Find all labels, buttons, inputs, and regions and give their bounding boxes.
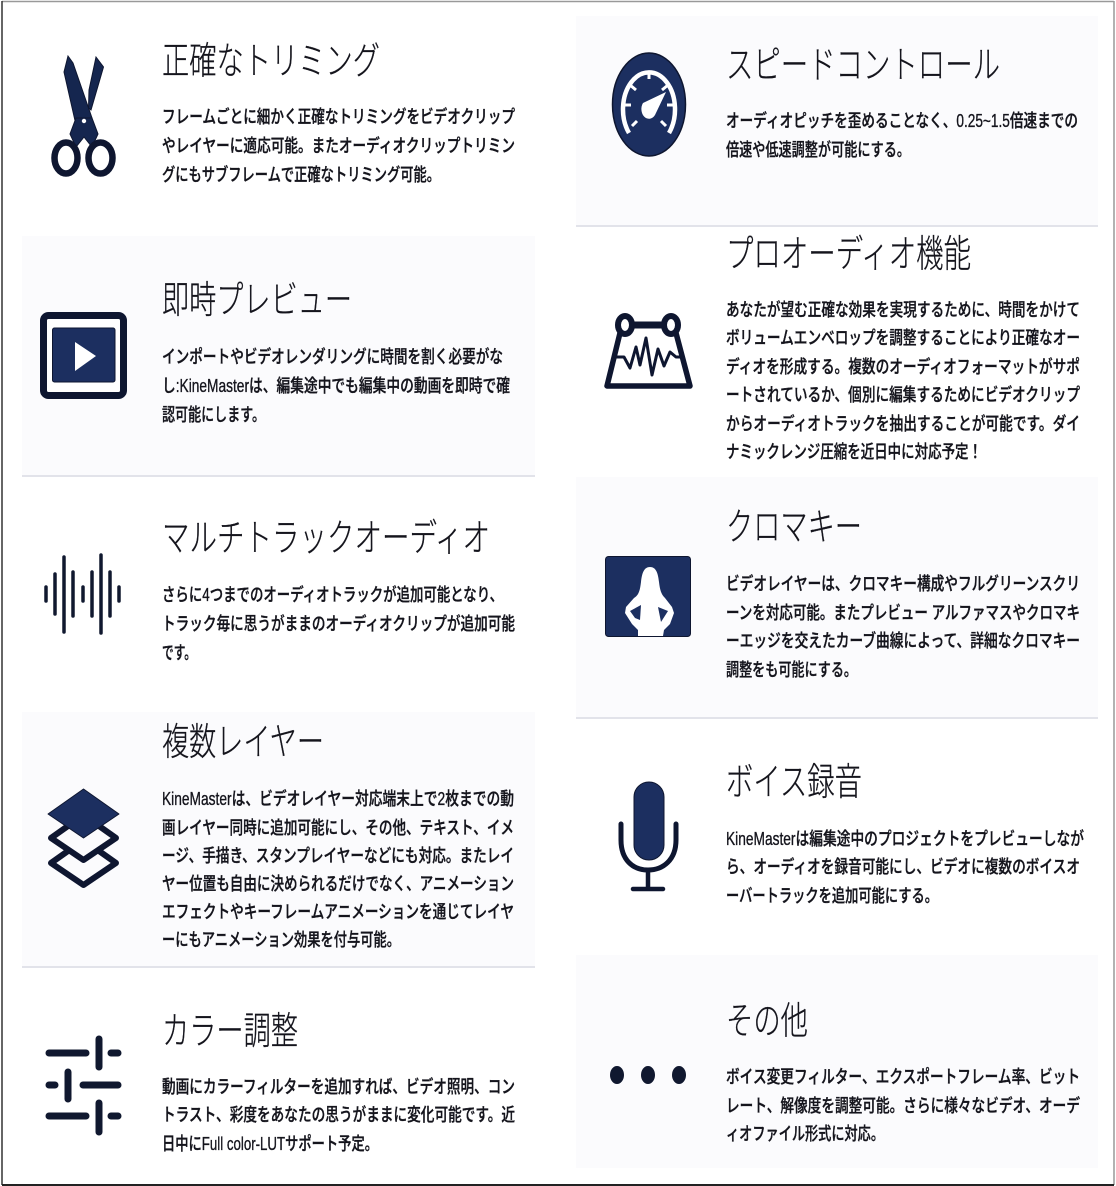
text: other features description: ィオファイル形式に対応。 [726,1124,884,1144]
icon: microphone [621,782,676,889]
panel: chroma key [576,477,1098,719]
text: multiple layers description: ーにもアニメーション効果を付与可能。 [162,930,400,950]
text: instant preview description: し:KineMasterは、編集途中でも編集中の動画を即時で確 [162,376,510,396]
text: multiple layers description: KineMasterは、ビデオレイヤー対応端末上で2枚までの動 [162,788,514,809]
text: instant preview description: インポートやビデオレンダリングに時間を割く必要がな [162,346,503,367]
heading: pro audio: プロオーディオ機能 [726,234,971,276]
icon: sliders [49,1039,118,1132]
text: precise trimming description [162,106,515,185]
icon: speedometer [612,53,686,156]
panel: other features [576,955,1098,1168]
icon: chroma key silhouette [606,556,690,636]
panel: color adjustment [49,1011,515,1154]
text: multiple layers description: ージ、手描き、スタンプレイヤーなどにも対応。またレイ [162,846,514,866]
text: chroma key description: 調整をも可能にする。 [726,660,857,680]
icon: layers [48,789,119,885]
heading: precise trimming: 正確なトリミング [162,41,380,83]
panel: multiple layers [22,712,535,968]
text: multiple layers description: エフェクトやキーフレームアニメーションを通じてレイヤ [162,902,514,922]
heading: speed control: スピードコントロール [726,45,1000,87]
text: pro audio description [726,299,1080,462]
text: chroma key description [726,573,1080,680]
panel: multitrack audio [46,518,515,663]
heading: instant preview: 即時プレビュー [162,280,352,322]
text: color adjustment description: 日中にFull color-LUTサポート予定。 [162,1134,378,1154]
heading: color adjustment: カラー調整 [162,1011,298,1053]
icon: audio envelope [607,316,690,386]
heading: voice recording: ボイス録音 [726,762,862,804]
text: color adjustment description: トラスト、彩度をあなたの思うがままに変化可能です。近 [162,1104,515,1125]
text: multitrack audio description: トラック毎に思うがままのオーディオクリップが追加可能 [162,613,515,634]
text: precise trimming description: グにもサブフレームで正確なトリミング可能。 [162,164,440,185]
panel: pro audio [607,234,1080,462]
text: instant preview description [162,346,510,425]
icon: play screen [44,316,124,396]
text: multiple layers description: 画レイヤー同時に追加可能にし、その他、テキスト、イメ [162,818,514,838]
text: multiple layers description: ヤー位置も自由に決められるだけでなく、アニメーション [162,874,514,894]
text: pro audio description: ナミックレンジ圧縮を近日中に対応予定！ [726,442,982,462]
panel: precise trimming [54,41,515,185]
text: precise trimming description: フレームごとに細かく正確なトリミングをビデオクリップ [162,106,515,127]
heading: other features: その他 [726,1001,808,1043]
panel: instant preview [22,236,535,477]
text: multiple layers description [162,788,514,950]
panel: speed control [576,16,1098,227]
text: speed control description [726,110,1078,160]
text: multitrack audio description: さらに4つまでのオーディオトラックが追加可能となり、 [162,584,503,605]
text: voice recording description: ーバートラックを追加可能にする。 [726,886,938,906]
text: precise trimming description: やレイヤーに適応可能。またオーディオクリップトリミン [162,135,515,156]
text: color adjustment description: 動画にカラーフィルターを追加すれば、ビデオ照明、コン [162,1076,515,1097]
text: speed control description: 倍速や低速調整が可能にする。 [726,139,910,160]
heading: multiple layers: 複数レイヤー [162,722,324,764]
panel: voice recording [621,762,1084,906]
icon: three dots [610,1066,686,1084]
text: instant preview description: 認可能にします。 [162,405,265,425]
text: multitrack audio description [162,584,515,663]
text: voice recording description [726,828,1084,906]
text: multitrack audio description: です。 [162,643,196,663]
heading: multitrack audio: マルチトラックオーディオ [162,518,490,560]
text: other features description [726,1067,1080,1144]
heading: chroma key: クロマキー [726,507,862,549]
icon: scissors [54,56,112,174]
text: color adjustment description [162,1076,515,1154]
icon: sound wave [46,555,119,633]
